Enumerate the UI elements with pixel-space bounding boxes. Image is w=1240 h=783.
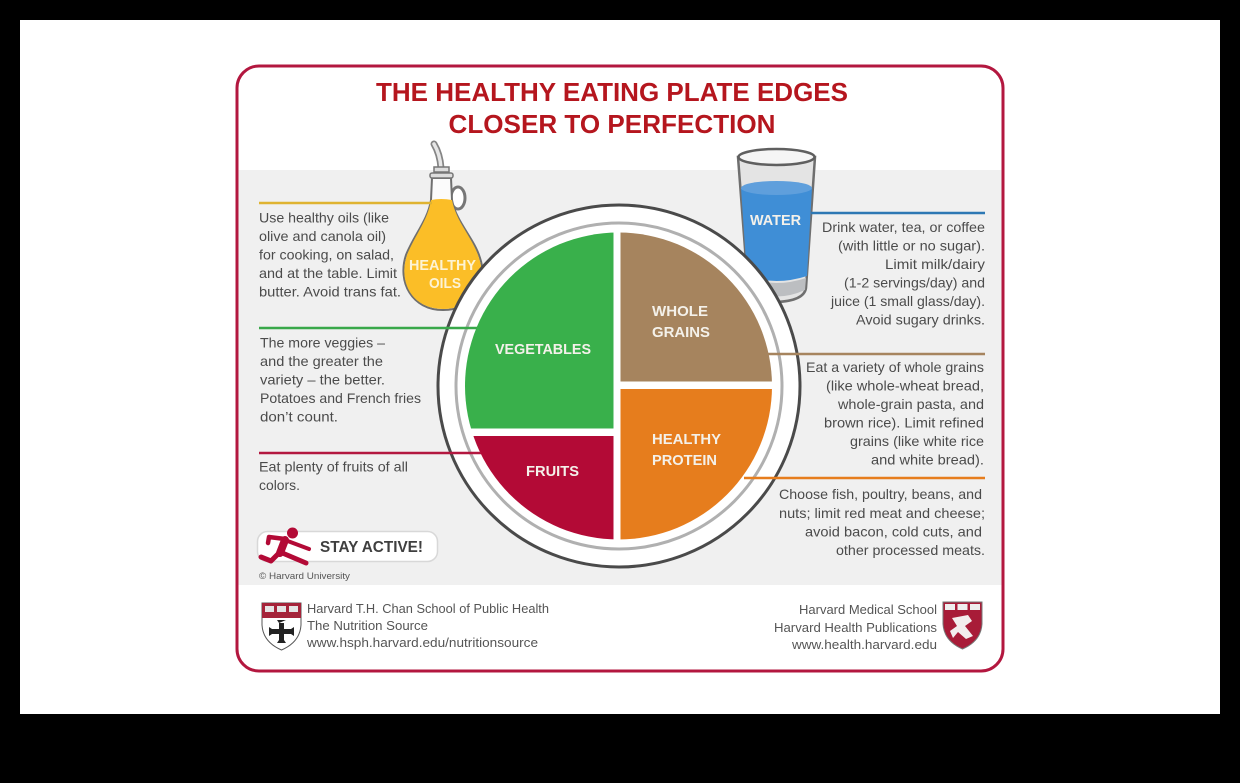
label: fruits: FRUITS: [526, 463, 579, 480]
logo: Harvard Chan shield: [262, 603, 301, 650]
callout: vegetables: don’t count.: [260, 408, 338, 424]
plate segment: whole grains: [620, 225, 780, 382]
callout: water: Avoid sugary drinks.: [856, 312, 985, 328]
icon: water glass: [738, 149, 815, 302]
callout: whole grains: brown rice). Limit refined: [824, 414, 984, 430]
water label: WATER: [750, 212, 801, 229]
panel: rounded red frame: [237, 66, 1003, 671]
callout: healthy oils: for cooking, on salad,: [259, 246, 394, 262]
callout: healthy oils: and at the table. Limit: [259, 265, 397, 281]
footer text: Harvard Medical: www.health.harvard.edu: [791, 637, 937, 652]
callout: healthy protein: [744, 478, 985, 558]
callout: whole grains: whole-grain pasta, and: [837, 396, 984, 412]
badge: stay active: [258, 528, 438, 563]
callout: vegetables: The more veggies –: [260, 334, 385, 350]
chart: plate: [438, 205, 800, 567]
callout: whole grains: grains (like white rice: [850, 433, 984, 449]
callout: water: (with little or no sugar).: [838, 238, 985, 254]
callout: healthy protein: other processed meats.: [836, 542, 985, 558]
plate segment: vegetables: [460, 225, 614, 428]
plate segment: healthy protein: [620, 389, 772, 540]
footer text: Harvard Medical: [774, 602, 938, 652]
callout: healthy oils: butter. Avoid trans fat.: [259, 284, 401, 300]
callout: healthy oils: Use healthy oils (like: [259, 210, 389, 226]
callout: whole grains: [768, 354, 985, 468]
callout: healthy protein: avoid bacon, cold cuts, and: [805, 524, 982, 540]
callout: vegetables: Potatoes and French fries: [260, 390, 421, 406]
logo: Harvard Medical shield: [943, 602, 982, 649]
title: THE HEALTHY EATING PLATE EDGES: [376, 77, 848, 107]
panel: grey content band: [238, 170, 1002, 585]
oil label: OILS: [429, 275, 461, 292]
label: whole grains: WHOLE: [652, 303, 708, 320]
title: CLOSER TO PERFECTION: [448, 109, 776, 139]
icon: running figure: [261, 528, 309, 563]
callout: water: juice (1 small glass/day).: [830, 293, 985, 309]
footer text: Harvard Medical: Harvard Health Publications: [774, 620, 938, 635]
callout: water: Limit milk/dairy: [885, 256, 985, 272]
callout: fruits: colors.: [259, 477, 300, 493]
callout: vegetables: [259, 328, 477, 424]
stay active text: STAY ACTIVE!: [320, 539, 423, 556]
callout: water: (1-2 servings/day) and: [844, 274, 985, 290]
label: vegetables: VEGETABLES: [495, 341, 591, 358]
callout: vegetables: and the greater the: [260, 353, 383, 369]
footer text: Harvard Chan: www.hsph.harvard.edu/nutritionsource: [306, 635, 538, 650]
callout: fruits: [259, 453, 481, 493]
label: whole grains: GRAINS: [652, 324, 710, 341]
oil label: HEALTHY: [409, 257, 476, 274]
title: [376, 77, 848, 139]
callout: whole grains: and white bread).: [871, 452, 984, 468]
label: whole grains: [652, 303, 710, 341]
callout: healthy oils: [259, 203, 432, 300]
label: healthy protein: HEALTHY: [652, 431, 721, 448]
callout: water: [811, 213, 985, 328]
oil label: [409, 257, 476, 292]
callout: healthy protein: nuts; limit red meat and cheese;: [779, 505, 985, 521]
label: healthy protein: PROTEIN: [652, 452, 717, 469]
footer text: Harvard Chan: [306, 601, 549, 650]
footer text: Harvard Medical: Harvard Medical School: [799, 602, 937, 617]
callout: water: Drink water, tea, or coffee: [822, 219, 985, 235]
callout: healthy oils: olive and canola oil): [259, 228, 386, 244]
callout: whole grains: (like whole-wheat bread,: [826, 378, 984, 394]
callout: vegetables: variety – the better.: [260, 372, 385, 388]
label: healthy protein: [652, 431, 721, 469]
icon: oil bottle: [403, 144, 483, 310]
plate segment: fruits: [474, 436, 614, 540]
copyright: © Harvard University: [259, 571, 350, 582]
footer text: Harvard Chan: The Nutrition Source: [307, 618, 428, 633]
callout: whole grains: Eat a variety of whole grains: [806, 359, 984, 375]
footer text: Harvard Chan: Harvard T.H. Chan School of Public Health: [307, 601, 549, 616]
callout: fruits: Eat plenty of fruits of all: [259, 458, 408, 474]
callout: healthy protein: Choose fish, poultry, beans, and: [779, 486, 982, 502]
